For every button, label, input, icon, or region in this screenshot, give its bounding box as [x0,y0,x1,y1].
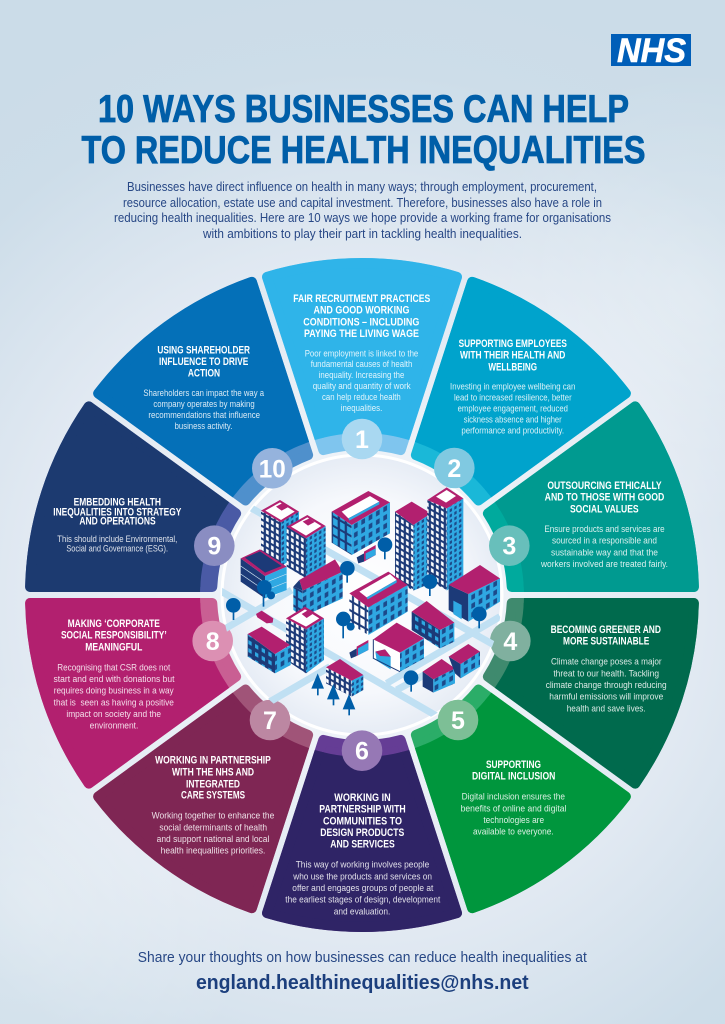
body text: Ensure products and services are [544,524,665,535]
body text: sickness absence and higher [464,415,562,426]
body text: Climate change poses a major [551,657,662,668]
body text: technologies are [483,815,544,826]
panel: 5 digital inclusion [410,684,631,914]
panel: 8 corporate social responsibility [25,598,242,789]
vehicle: truck [357,545,376,563]
number badge 8 [192,621,233,661]
heading: INFLUENCE TO DRIVE [159,356,248,368]
vehicle: car [256,611,273,623]
body text: Social and Governance (ESG). [66,544,168,555]
tree [340,561,355,583]
body text: lead to increased resilience, better [454,393,572,404]
body text: can help reduce health [322,392,401,403]
body text [143,388,265,432]
building: small N [423,659,455,693]
body text: inequality. Increasing the [319,370,404,381]
body text [461,792,566,838]
body text [546,657,667,714]
body text: that is seen as having a positive [54,697,174,708]
body text: environment. [90,721,138,732]
number badge 7 [250,700,290,740]
panel: 2 supporting employees [410,276,631,506]
body text: harmful emissions will improve [549,692,663,703]
heading: AND SERVICES [330,839,395,851]
number badge 9 [194,525,235,566]
pine tree [327,684,340,705]
heading: PARTNERSHIP WITH [319,804,406,816]
number badge 7: 7 [263,707,277,735]
building: warehouse [373,623,424,672]
body text: and support national and local [157,834,269,845]
title: 10 WAYS BUSINESSES CAN HELP [98,88,629,131]
building: large right block [449,565,500,622]
heading: FAIR RECRUITMENT PRACTICES [293,293,430,305]
vehicle: truck [349,640,368,658]
heading [53,497,182,527]
building: small O [449,644,480,678]
heading: DESIGN PRODUCTS [320,827,404,839]
tree [378,537,392,559]
body text: Investing in employee wellbeing can [450,382,575,393]
body text: inequalities. [341,403,382,414]
number badge 2: 2 [447,455,461,483]
body text: This way of working involves people [296,859,429,870]
intro paragraph: Businesses have direct influence on health in many ways; through employment, procurement, [127,179,597,194]
city illustration [220,487,500,716]
heading: MORE SUSTAINABLE [563,636,649,648]
panel: 4 becoming greener [482,598,699,789]
number badge 5: 5 [451,707,465,735]
panel: 7 NHS partnership [93,684,314,914]
heading [319,792,406,851]
tree [472,607,487,628]
heading: EMBEDDING HEALTH [74,497,161,509]
heading: WORKING IN PARTNERSHIP [155,755,271,767]
tree [226,598,241,620]
building: low shop [248,627,291,673]
footer call to action [138,949,588,994]
number badge 6 [342,730,382,771]
building: tower A [261,500,299,567]
heading: USING SHAREHOLDER [157,344,250,356]
tree [257,580,275,607]
heading: AND OPERATIONS [79,515,156,527]
body text: available to everyone. [473,827,554,838]
building: tower E [427,487,463,591]
body text: quality and quantity of work [313,381,411,392]
building: small P [326,659,363,697]
number badge 3: 3 [502,533,516,561]
number badge 4 [490,621,531,661]
heading [551,624,661,648]
body text: the earliest stages of design, development [285,895,441,906]
heading: AND TO THOSE WITH GOOD [545,492,664,504]
heading [61,618,167,653]
building: wide office [332,491,390,555]
body text: sourced in a responsible and [552,536,657,547]
number badge 5 [438,700,478,740]
body text: employee engagement, reduced [458,404,568,415]
heading: MEANINGFUL [85,641,143,653]
body text: performance and productivity. [461,426,564,437]
panel: 1 fair recruitment [267,263,457,459]
body text: workers involved are treated fairly. [540,559,668,570]
heading: OUTSOURCING ETHICALLY [547,480,662,492]
heading: INTEGRATED [186,778,240,790]
heading: PAYING THE LIVING WAGE [304,328,419,340]
body text: health inequalities priorities. [161,846,265,857]
panel: 10 shareholder influence [93,276,314,506]
body text: fundamental causes of health [311,359,412,370]
building: block L [412,601,454,648]
heading: SUPPORTING EMPLOYEES [459,338,567,350]
tree [423,574,437,596]
body text [152,811,274,857]
heading [157,344,250,380]
intro paragraph: resource allocation, estate use and capital investment. Therefore, businesses also have a role in [123,195,602,210]
building: pitched roof [293,559,343,617]
body text: business activity. [175,421,232,432]
body text: Shareholders can impact the way a [143,388,265,399]
body text: impact on society and the [66,709,161,720]
intro paragraph: reducing health inequalities. Here are 10 ways we hope provide a working frame for organisations [114,210,611,225]
heading: DIGITAL INCLUSION [472,771,555,783]
heading: MAKING ‘CORPORATE [68,618,160,630]
body text [305,348,418,414]
body text: recommendations that influence [148,410,260,421]
body text [540,524,668,570]
heading: ACTION [188,368,220,380]
heading [459,338,567,373]
footer call to action: england.healthinequalities@nhs.net [196,971,529,994]
panel: 3 outsourcing ethically [482,401,699,592]
heading [545,480,664,515]
body text: Digital inclusion ensures the [462,792,565,803]
central hub circle [222,455,502,735]
tree [404,670,418,692]
building: centre office [349,572,408,635]
panel: 9 embedding health inequalities [25,401,242,592]
building: tower B [287,515,326,578]
building: tower D [395,502,431,591]
body text [450,382,575,437]
number badge 2 [434,448,475,488]
body text: who use the products and services on [292,871,432,882]
pine tree [311,673,324,695]
number badge 9: 9 [207,533,221,561]
NHS logo: NHS [617,32,686,70]
title [82,88,646,172]
number badge 1: 1 [355,426,369,454]
number badge 3 [489,525,530,566]
footer call to action: Share your thoughts on how businesses can reduce health inequalities at [138,949,588,966]
body text: climate change through reducing [546,680,667,691]
heading [472,759,555,783]
heading: WITH THEIR HEALTH AND [460,350,565,362]
roads [220,507,500,716]
building: striped block [241,549,287,598]
number badge 10 [252,448,293,489]
intro paragraph [114,179,611,241]
intro paragraph: with ambitions to play their part in tackling health inequalities. [202,226,522,241]
heading [293,293,430,340]
body text [285,859,441,917]
panel: 6 communities [267,730,457,927]
heading: SOCIAL RESPONSIBILITY’ [61,630,167,642]
body text: This should include Environmental, [57,534,177,545]
heading: CONDITIONS – INCLUDING [303,316,419,328]
body text: requires doing business in a way [54,686,174,697]
heading: SOCIAL VALUES [570,503,639,515]
body text: benefits of online and digital [461,803,566,814]
body text: company operates by making [153,399,255,410]
body text: offer and engages groups of people at [292,883,434,894]
number badge 6: 6 [355,738,369,766]
body text: and evaluation. [334,906,390,917]
body text [54,662,175,732]
body text: health and save lives. [567,703,646,714]
body text: Working together to enhance the [152,811,274,822]
body text: start and end with donations but [54,674,175,685]
heading: COMMUNITIES TO [323,815,402,827]
building: tower H [286,607,324,673]
heading: AND GOOD WORKING [314,305,410,317]
body text: sustainable way and that the [551,547,658,558]
body text: Poor employment is linked to the [305,348,418,359]
body text: threat to our health. Tackling [553,668,659,679]
heading: BECOMING GREENER AND [551,624,661,636]
tree [336,612,355,638]
number badge 8: 8 [206,628,220,656]
pine tree [343,694,355,715]
heading [155,755,271,802]
body text: Recognising that CSR does not [57,662,171,673]
heading: SUPPORTING [486,759,541,771]
heading: INEQUALITIES INTO STRATEGY [53,506,182,518]
number badge 1 [342,419,382,459]
body text [57,534,177,555]
number badge 4: 4 [503,628,517,656]
heading: WELLBEING [488,361,537,373]
body text: social determinants of health [159,822,267,833]
heading: WORKING IN [334,792,391,804]
number badge 10: 10 [259,455,286,483]
heading: CARE SYSTEMS [181,790,245,802]
heading: WITH THE NHS AND [172,766,254,778]
